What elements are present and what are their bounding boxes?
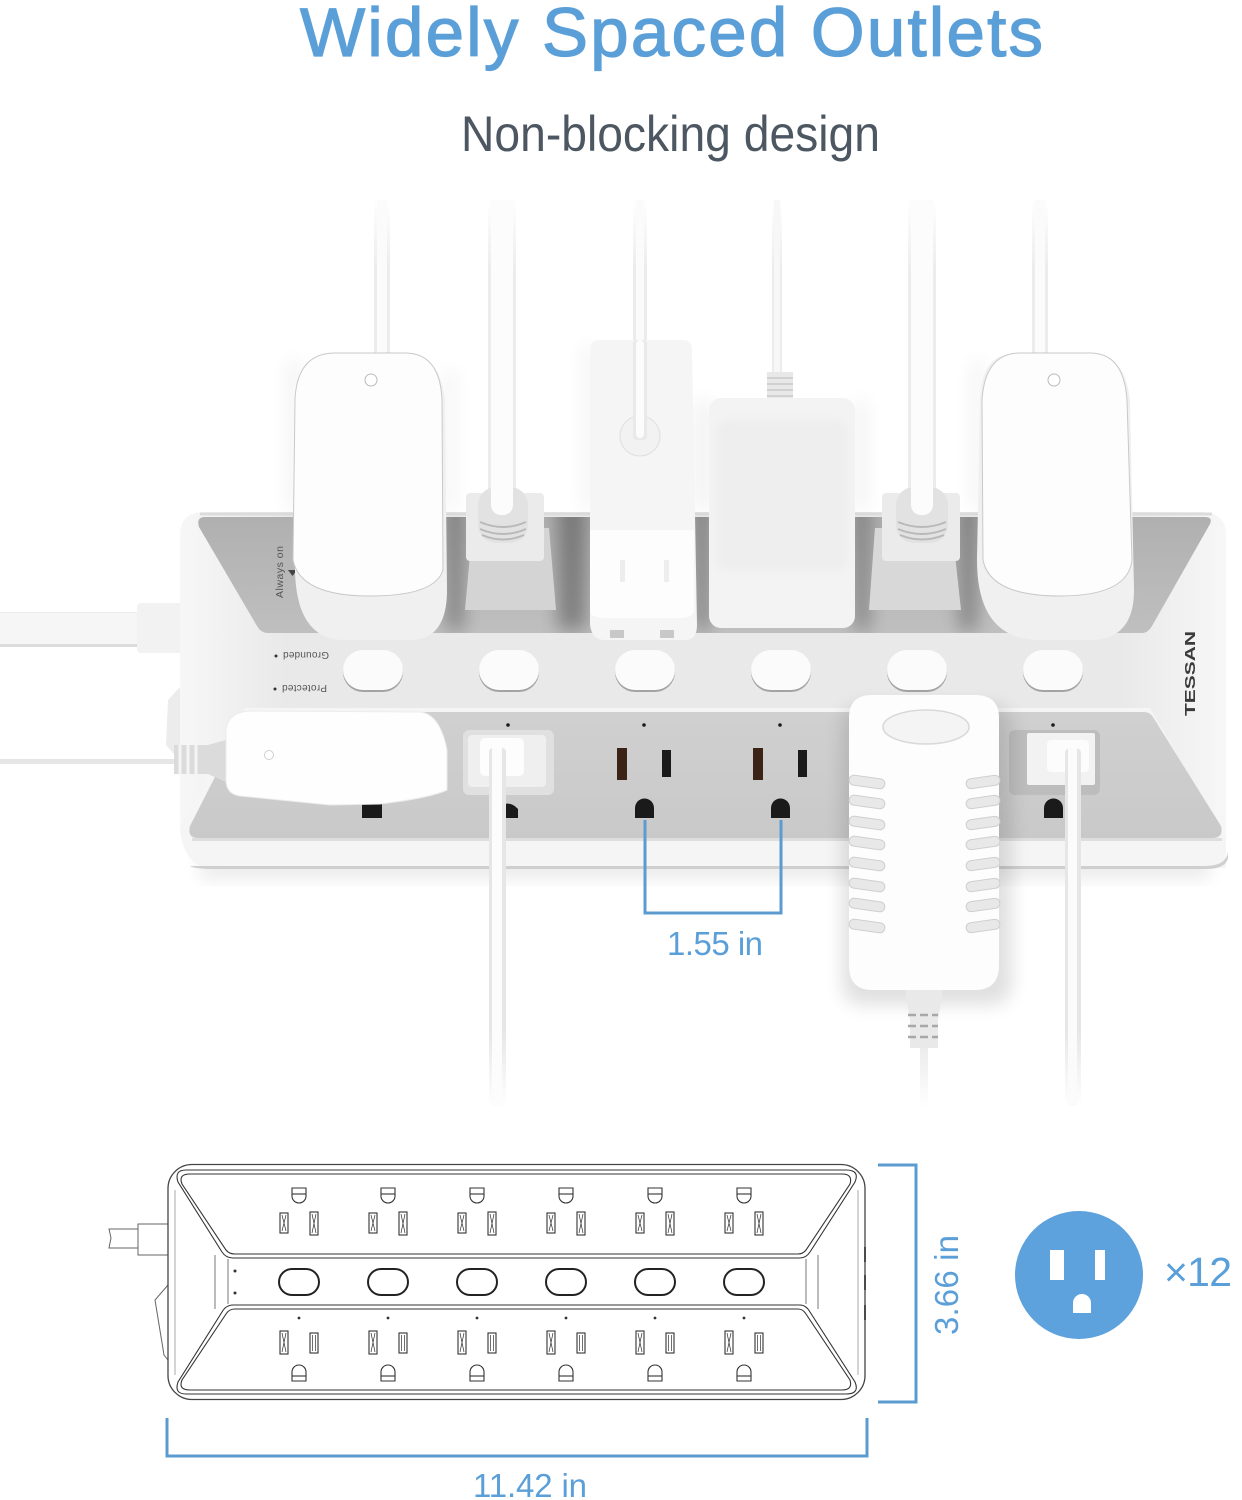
switch buttons	[343, 650, 1083, 692]
cord and plug outline	[109, 1224, 169, 1360]
grounded plug right	[869, 470, 961, 610]
subtitle: Non-blocking design	[461, 106, 880, 162]
grounded plug left	[465, 470, 556, 610]
thin cord left	[0, 740, 226, 782]
indicator labels: Protected	[282, 682, 327, 693]
power brick	[709, 372, 855, 628]
flat adapter	[226, 711, 447, 805]
indicator labels	[274, 546, 329, 693]
laptop charger	[590, 340, 697, 640]
top panel outline	[177, 1170, 856, 1258]
icon: outlet	[1015, 1211, 1143, 1339]
small plug left outlet	[463, 730, 554, 1106]
bottom panel outline	[177, 1305, 856, 1394]
spacing label: 1.55 in	[667, 925, 763, 962]
small plug right outlet	[1009, 730, 1100, 1106]
large vented adapter	[848, 695, 1001, 1108]
open outlets	[362, 723, 1063, 818]
width bracket	[167, 1418, 867, 1456]
top rim	[200, 512, 1212, 516]
adapter left	[293, 353, 447, 640]
cords	[374, 200, 1048, 505]
outlet spacing bracket	[645, 820, 781, 913]
power strip photo	[0, 200, 1228, 1108]
height bracket	[878, 1165, 916, 1402]
outlet count: ×12	[1164, 1249, 1232, 1295]
shadows	[447, 500, 976, 630]
rocker switch	[166, 686, 181, 762]
bottom panel rim	[180, 708, 1226, 868]
power cord	[0, 603, 183, 653]
bottom line outlets	[280, 1317, 763, 1381]
brand logo: TESSAN	[1182, 631, 1199, 716]
center band details	[215, 1255, 818, 1309]
line buttons	[279, 1269, 764, 1295]
indicator labels: Grounded	[283, 649, 329, 660]
led	[264, 750, 274, 760]
bottom gray panel	[189, 712, 1222, 838]
large adapter shadow	[842, 705, 1012, 1005]
indicator labels: Always on	[274, 546, 286, 598]
top line outlets	[280, 1188, 763, 1235]
outer outline	[168, 1164, 865, 1400]
strip body	[180, 512, 1228, 869]
height label: 3.66 in	[928, 1235, 965, 1335]
line drawing of strip	[109, 1164, 865, 1400]
shadow under strip	[200, 855, 1210, 879]
adapter right	[977, 353, 1134, 640]
top gray panel	[198, 517, 1211, 633]
